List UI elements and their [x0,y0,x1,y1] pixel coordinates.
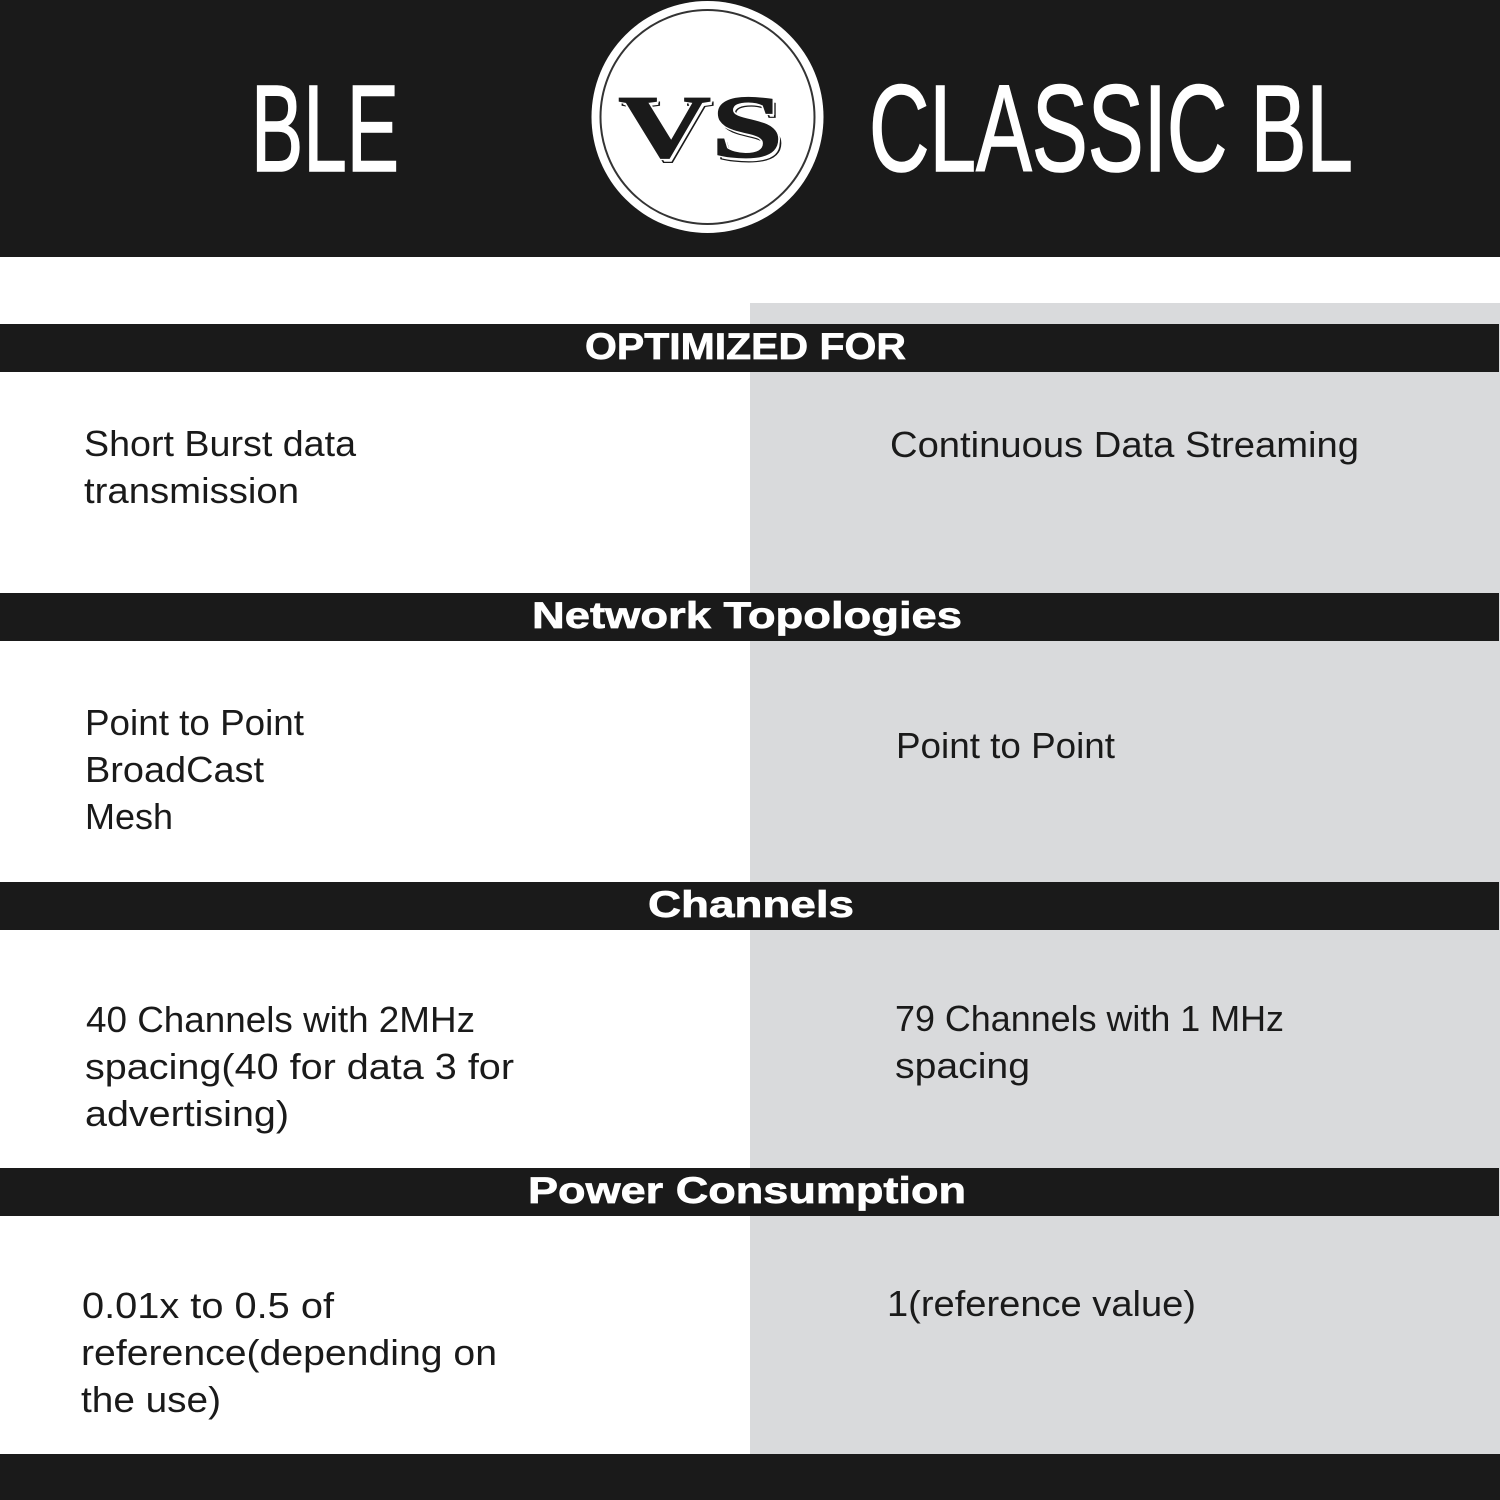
text: BLE channels [85,999,514,1134]
heading: optimized for: OPTIMIZED FOR [585,326,906,367]
section: power consumption [0,1168,1499,1420]
header [0,0,1500,257]
text: BLE channels: advertising) [85,1093,289,1134]
text: BLE power: the use) [81,1379,221,1420]
icon: VS badge: VS [618,78,783,177]
panel: right column background [750,303,1500,1454]
text: classic topologies: Point to Point [896,725,1115,766]
section: channels [0,882,1499,1134]
icon: VS badge: VS [618,78,783,177]
text: BLE optimized for: transmission [84,470,299,511]
text: BLE optimized for [84,423,357,511]
heading: power consumption [0,1168,1499,1216]
text: BLE topologies [85,702,304,837]
text: BLE topologies: BroadCast [85,749,264,790]
section: optimized for [0,324,1499,511]
text: classic channels: 79 Channels with 1 MHz [895,998,1284,1039]
text: classic channels: spacing [895,1045,1030,1086]
heading: channels [0,882,1499,930]
icon: VS badge [592,1,824,233]
section: network topologies [0,593,1499,837]
heading: network topologies [0,593,1499,641]
text: classic optimized for: Continuous Data Streaming [890,424,1359,465]
icon: VS badge: VS [621,82,786,181]
text: BLE power: reference(depending on [81,1332,497,1373]
title: BLE: BLE [251,61,399,198]
heading: optimized for [0,324,1499,372]
heading: power consumption: Power Consumption [528,1170,966,1211]
text: BLE channels: spacing(40 for data 3 for [85,1046,514,1087]
text: BLE power [81,1285,497,1420]
text: BLE channels: 40 Channels with 2MHz [86,999,475,1040]
text: BLE optimized for: Short Burst data [84,423,357,464]
text: BLE topologies: Point to Point [85,702,304,743]
heading: network topologies: Network Topologies [532,595,962,636]
text: BLE power: 0.01x to 0.5 of [82,1285,335,1326]
text: classic channels [895,998,1284,1086]
footer bar [0,1454,1500,1500]
text: BLE topologies: Mesh [85,796,173,837]
text: classic power: 1(reference value) [887,1283,1196,1324]
heading: channels: Channels [648,884,854,925]
